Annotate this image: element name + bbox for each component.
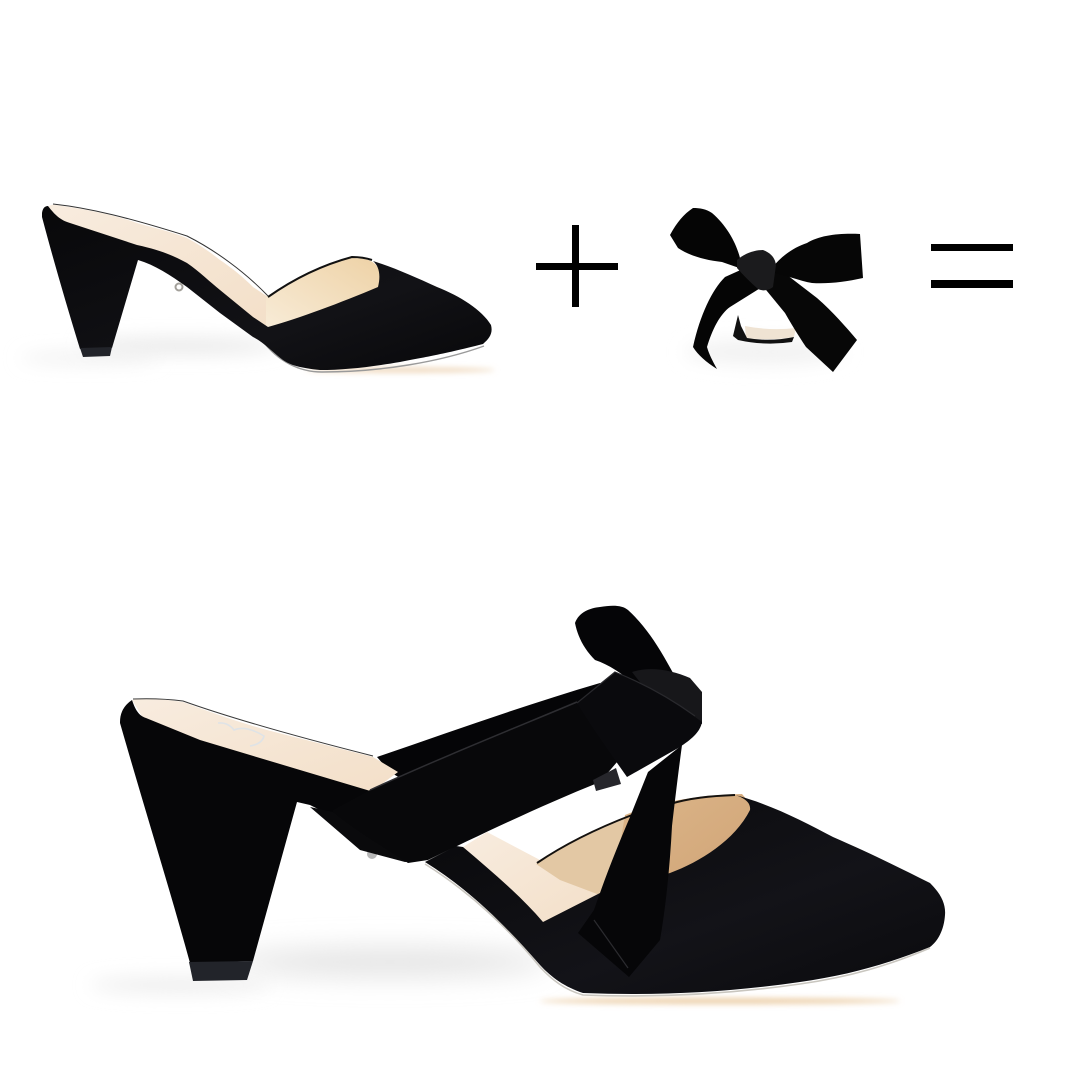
icon: plus sign [536, 225, 618, 307]
mule insole [48, 205, 275, 330]
panel: mule with bow attached [90, 606, 945, 1004]
bow right loop [772, 234, 863, 283]
bow knot [632, 669, 702, 724]
heel tip [189, 961, 253, 981]
left interior [536, 816, 640, 897]
bow right tail [762, 268, 857, 372]
styled shoe heel and seat [120, 700, 400, 963]
bow tail [578, 745, 682, 977]
bow insole [745, 326, 796, 339]
rim highlight [133, 699, 373, 756]
tail stitching [594, 920, 628, 968]
bow front fold [577, 672, 702, 777]
sole line [425, 864, 930, 996]
pin [367, 849, 377, 859]
back strap [377, 683, 620, 790]
bow knot [737, 250, 776, 290]
bow left loop [670, 208, 745, 270]
shadow: mule [20, 339, 495, 372]
panel: velvet bow [670, 208, 863, 372]
satin tab [593, 768, 621, 791]
strap lower bit [310, 807, 425, 862]
front strap [333, 700, 640, 863]
styled insole [132, 699, 398, 795]
mule interior [266, 258, 381, 330]
logo on insole [218, 723, 264, 746]
shadow: bow [685, 340, 845, 364]
mule pin [176, 284, 182, 290]
cream strip [463, 832, 602, 924]
shadow: styled shoe [90, 950, 900, 1004]
right interior [610, 794, 760, 905]
icon: equals sign [931, 244, 1013, 288]
panel: plain mule shoe [20, 204, 495, 372]
mule sole line [262, 340, 484, 372]
mule heel and body [42, 206, 492, 370]
bow rear loop [575, 606, 677, 690]
bow back strap [733, 315, 794, 344]
bow left tail [693, 268, 762, 369]
shank and toe [425, 795, 945, 994]
mule heel tip [80, 347, 112, 357]
